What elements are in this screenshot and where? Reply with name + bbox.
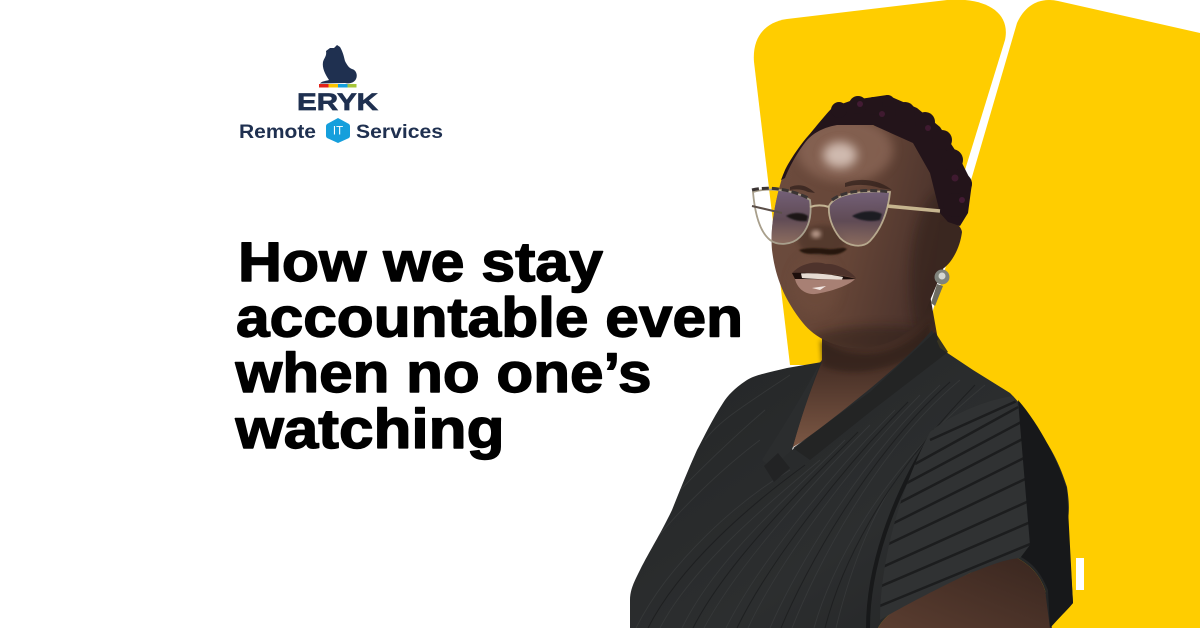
sleeve stripes (880, 396, 1030, 620)
icon: IT hexagon: IT (333, 126, 343, 138)
face (772, 125, 962, 344)
hair (781, 95, 972, 226)
sleeve dark panel (1018, 400, 1073, 628)
person (630, 95, 1073, 628)
icon: IT hexagon (326, 118, 350, 143)
temple arm (887, 206, 940, 211)
headline: watching (234, 397, 504, 460)
right lens (829, 191, 890, 246)
headline (234, 230, 743, 460)
nose (798, 225, 847, 255)
brows (790, 185, 815, 193)
panel: right yellow shape (860, 0, 1200, 628)
panel: left yellow shape (754, 0, 1006, 365)
left lens (752, 188, 811, 244)
tagline: Remote: Remote (239, 121, 316, 143)
mouth (792, 262, 856, 294)
headline: How we stay (238, 230, 603, 293)
colour strip (319, 84, 356, 88)
ear (935, 220, 962, 268)
shirt ribs (636, 375, 985, 628)
tagline: Services: Services (356, 121, 443, 143)
arm (878, 558, 1052, 628)
white accent bar (1076, 558, 1084, 590)
wordmark: ERYK (297, 89, 379, 116)
chin shadow (820, 322, 930, 372)
bridge (810, 206, 829, 207)
glasses (752, 188, 940, 246)
headline: accountable even (236, 286, 743, 348)
headline: when no one’s (234, 341, 652, 404)
neck and chest (785, 295, 938, 452)
icon: bear mascot (320, 45, 357, 84)
shirt (630, 330, 1073, 628)
neckline trim (793, 332, 948, 460)
face shading (908, 193, 946, 324)
earring (931, 270, 950, 306)
logo (239, 45, 443, 143)
forehead highlight (823, 142, 857, 168)
